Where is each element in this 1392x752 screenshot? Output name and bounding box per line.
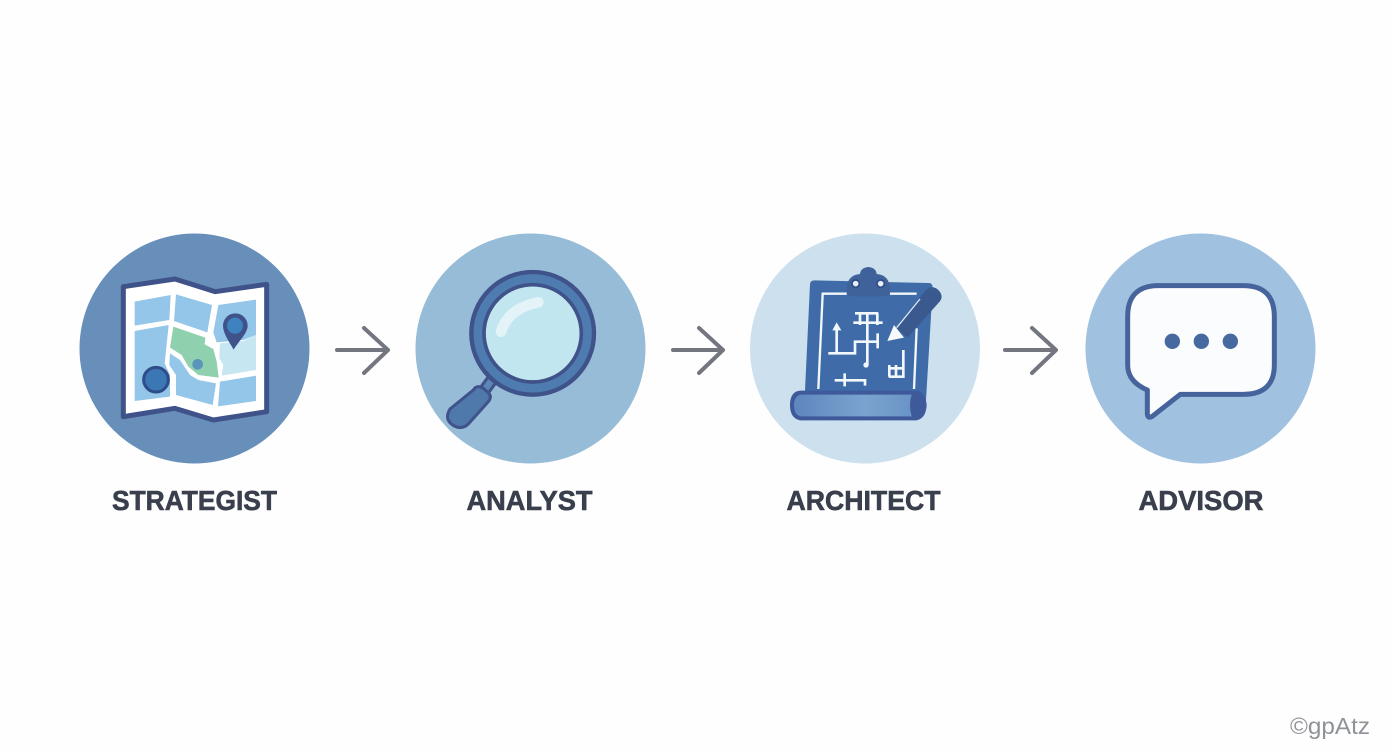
arrow 2	[673, 328, 723, 373]
icon: speech bubble	[1128, 286, 1274, 417]
label: advisor: ADVISOR	[1138, 485, 1264, 516]
watermark: ©gpAtz	[1290, 713, 1370, 739]
panel: strategist step	[80, 234, 310, 516]
icon: clipboard clip	[847, 267, 890, 296]
arrow 1	[337, 328, 388, 373]
arrow 3	[1005, 328, 1056, 373]
icon circle: analyst	[416, 234, 646, 464]
icon circle: advisor	[1086, 234, 1316, 464]
icon: magnifying glass	[447, 272, 594, 428]
icon: folded map	[123, 279, 267, 420]
panel: advisor step	[1086, 234, 1316, 516]
label: analyst: ANALYST	[466, 485, 592, 516]
icon: scroll roller	[790, 391, 927, 420]
icon: large map marker	[144, 367, 168, 392]
icon: map pin	[223, 313, 248, 350]
icon circle: strategist	[80, 234, 310, 464]
label: strategist: STRATEGIST	[112, 485, 277, 516]
icon: pencil	[896, 288, 941, 337]
panel: architect step	[750, 234, 980, 516]
panel: analyst step	[416, 234, 646, 516]
icon circle: architect	[750, 234, 980, 464]
icon: blueprint	[790, 267, 941, 420]
label: architect: ARCHITECT	[786, 485, 940, 516]
blueprint lines	[828, 313, 905, 386]
